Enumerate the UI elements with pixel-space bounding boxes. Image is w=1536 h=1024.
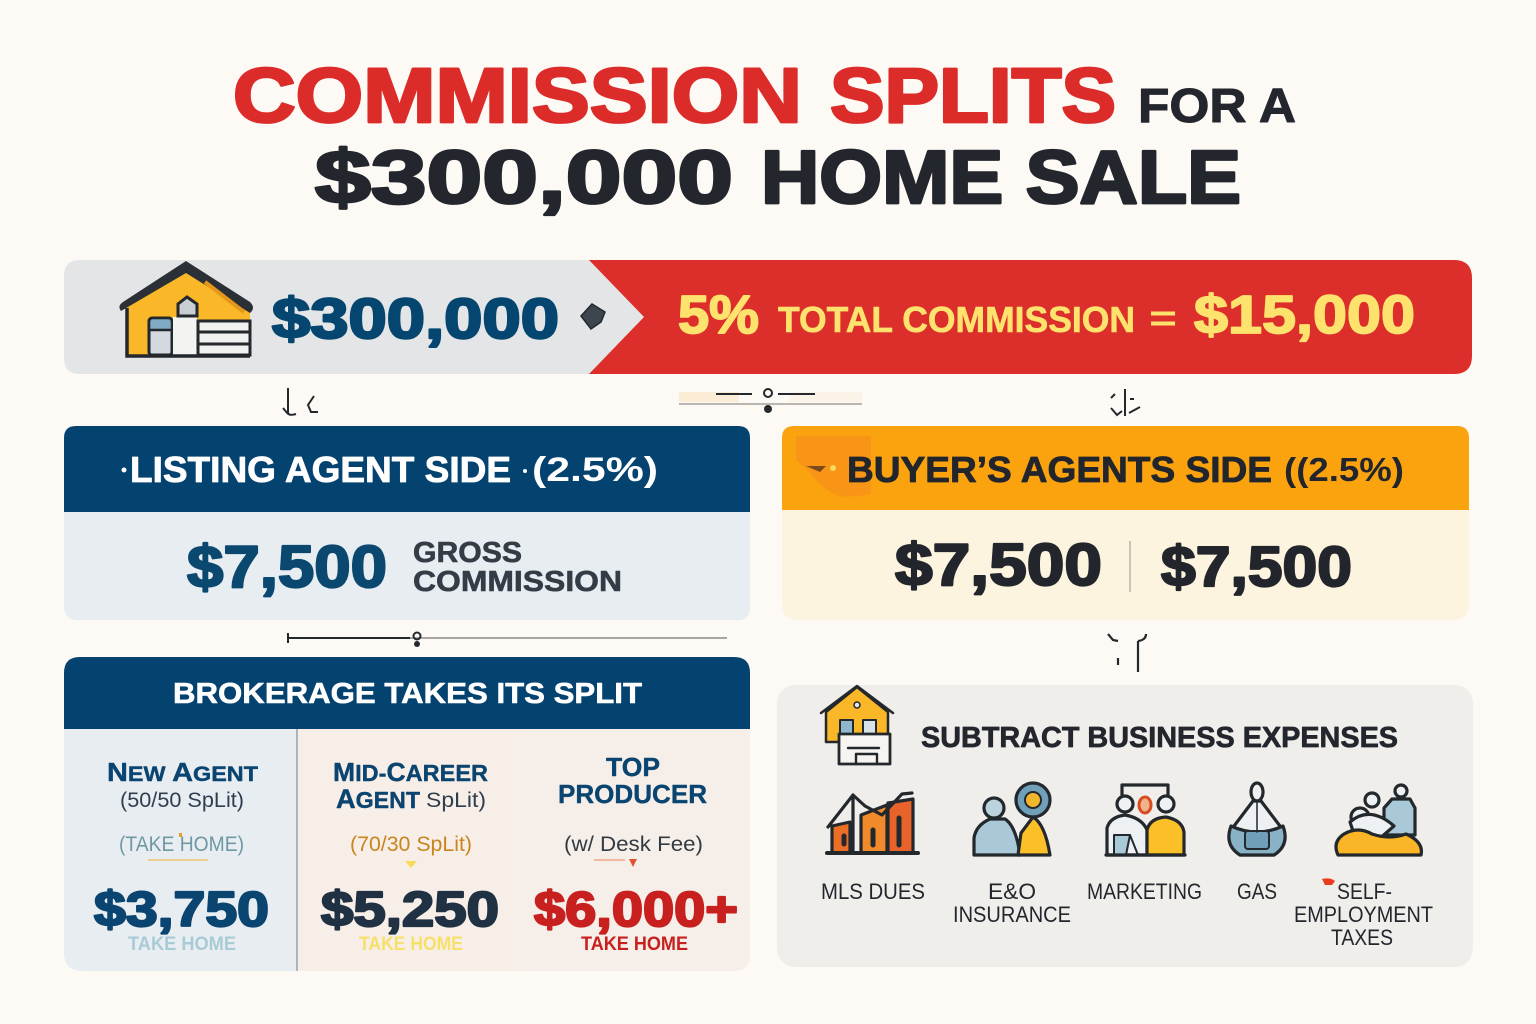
connector: listing to brokerage [288,632,727,647]
column: top producer: (w/ Desk Fee) [564,833,703,856]
heading: LISTING AGENT SIDE [130,449,511,490]
heading: SUBTRACT BUSINESS EXPENSES [921,722,1398,754]
column: top producer: TAKE HOME [581,934,688,955]
panel: listing agent side [64,426,750,620]
panel: buyer's agent side [782,426,1469,620]
heading: (2.5%) [532,451,658,489]
column: mid-career agent [321,757,499,955]
expense: gas: GAS [1237,879,1277,904]
icon: house [119,261,253,356]
gross commission label: GROSS [413,537,522,569]
gross commission label [413,537,622,598]
column: new agent: NEW AGENT [107,757,258,787]
column: new agent: TAKE HOME [128,934,236,955]
amount left: $7,500 [895,532,1102,598]
expense: E&O insurance [953,783,1071,927]
title: COMMISSION [233,53,802,139]
banner: sale price and total commission [64,260,1472,374]
icon: orange tag [796,436,871,497]
column: new agent: $3,750 [94,883,269,937]
commission text: TOTAL COMMISSION [778,299,1135,340]
arrow: to expenses [1108,634,1146,672]
gross commission amount: $7,500 [187,534,387,600]
expense: MLS dues: MLS DUES [821,879,925,904]
arrow: to buyer side [1111,389,1140,416]
heading: ((2.5%) [1284,451,1404,488]
expense: gas [1229,783,1285,904]
expense: MLS dues [821,793,925,904]
expense: self-employment taxes: TAXES [1331,925,1393,950]
title [233,53,1296,219]
title: SPLITS [830,53,1116,139]
column: mid-career agent: (70/30 SpLit) [350,833,472,856]
column: mid-career agent: SpLit) [426,789,486,812]
arrow: to listing side [283,388,318,415]
commission text: 5% [678,285,759,345]
panel: subtract business expenses [777,685,1473,967]
icon: small connector glyph [581,304,605,329]
expense: E&O insurance: E&O [988,879,1036,904]
column: new agent: (TAKE HOME) [119,833,244,856]
column: mid-career agent: MID-CAREER [333,757,488,787]
column: top producer: $6,000+ [534,883,738,937]
gross commission label: COMMISSION [413,566,622,598]
expense: marketing [1087,785,1202,904]
panel: brokerage takes its split [64,657,750,971]
title: FOR A [1138,80,1296,133]
connector: centre split [679,389,862,413]
expense: self-employment taxes: SELF- [1337,879,1392,904]
sale price: $300,000 [272,287,559,351]
commission text: $15,000 [1194,285,1415,345]
title: HOME SALE [761,135,1241,219]
amount right: $7,500 [1161,535,1352,599]
column: top producer: PRODUCER [558,779,707,809]
column: mid-career agent: AGENT [336,784,420,814]
expense: E&O insurance: INSURANCE [953,902,1071,927]
title: $300,000 [315,135,733,219]
column: top producer: TOP [606,752,660,782]
column: new agent: (50/50 SpLit) [120,789,244,812]
divider [1129,541,1131,592]
column: mid-career agent: TAKE HOME [359,934,463,955]
column: new agent [94,757,269,955]
heading: BUYER’S AGENTS SIDE [847,449,1272,490]
heading [122,449,658,490]
expense: self-employment taxes: EMPLOYMENT [1294,902,1433,927]
column: top producer [534,752,738,955]
heading: BROKERAGE TAKES ITS SPLIT [173,678,642,710]
commission text [678,285,1415,345]
commission text: = [1149,298,1177,339]
expense: marketing: MARKETING [1087,879,1202,904]
icon: house with document [821,686,893,764]
column: mid-career agent: $5,250 [321,883,499,937]
expense: self-employment taxes [1294,785,1433,950]
